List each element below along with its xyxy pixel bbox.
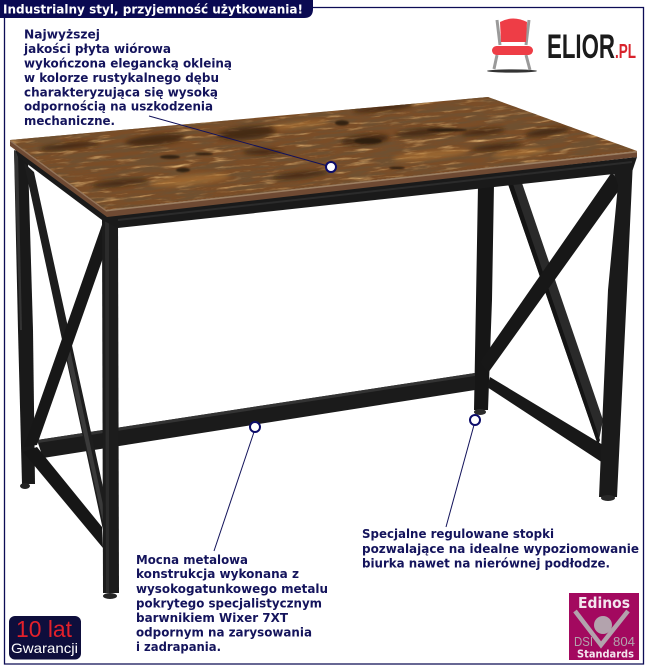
icon: red chair	[487, 18, 537, 73]
feet text: Specjalne regulowane stopki	[362, 527, 554, 541]
left X brace	[24, 163, 103, 530]
front left leg	[102, 217, 119, 593]
frame text: Mocna metalowa	[136, 553, 248, 567]
callout text: jakości płyta wiórowa	[23, 42, 171, 56]
frame text: pokrytego specjalistycznym	[136, 596, 322, 610]
frame text: barwnikiem Wixer 7XT	[136, 611, 289, 625]
frame text: konstrukcja wykonana z	[136, 567, 299, 581]
callout text: odpornością na uszkodzenia	[24, 100, 213, 114]
feet text	[362, 527, 639, 570]
callout: metal frame	[136, 422, 328, 654]
feet text: pozwalające na idealne wypoziomowanie	[362, 542, 639, 556]
lower rail	[37, 373, 475, 458]
callout leader line	[149, 116, 328, 166]
feet marker	[470, 415, 480, 425]
icon: V and circle	[575, 611, 628, 645]
callout text: wykończona elegancką okleiną	[24, 56, 232, 70]
frame text: i zadrapania.	[136, 640, 221, 654]
header text: Industrialny styl, przyjemność użytkowania!	[3, 2, 303, 16]
frame leader line	[214, 432, 254, 551]
callout text: w kolorze rustykalnego dębu	[24, 71, 219, 85]
badge 804 code: 804	[613, 634, 635, 649]
badge DSI code: DSI	[574, 634, 593, 649]
callout: adjustable feet	[362, 415, 639, 570]
header banner	[0, 0, 313, 18]
callout text: Najwyższej	[24, 28, 100, 42]
frame text: odpornym na zarysowania	[136, 626, 312, 640]
badge: Edinos standards	[569, 593, 639, 660]
logo wordmark: ELIOR	[547, 28, 615, 66]
right X brace	[508, 183, 603, 445]
badge name: Edinos	[578, 594, 630, 612]
desk illustration	[10, 97, 637, 599]
callout text	[23, 28, 232, 128]
callout text: mechaniczne.	[24, 114, 115, 128]
badge: 10 year warranty	[9, 616, 81, 660]
apron	[14, 147, 637, 228]
table top edge	[10, 140, 637, 217]
callout: table top	[23, 28, 336, 172]
logo suffix: .PL	[615, 41, 636, 63]
badge standards label: Standards	[577, 648, 634, 660]
back right leg	[474, 184, 494, 410]
logo: Elior.pl	[487, 18, 636, 73]
table top	[10, 97, 637, 217]
frame text: wysokogatunkowego metalu	[136, 582, 328, 596]
feet text: biurka nawet na nierównej podłodze.	[362, 556, 610, 570]
callout text: charakteryzująca się wysoką	[24, 86, 218, 100]
frame text	[136, 553, 328, 654]
callout marker	[326, 162, 336, 172]
back left leg	[14, 150, 35, 484]
feet leader line	[446, 425, 474, 527]
badge label: Gwarancji	[11, 640, 78, 656]
badge years: 10 lat	[16, 616, 73, 642]
frame marker	[250, 422, 260, 432]
front right leg	[599, 160, 633, 497]
